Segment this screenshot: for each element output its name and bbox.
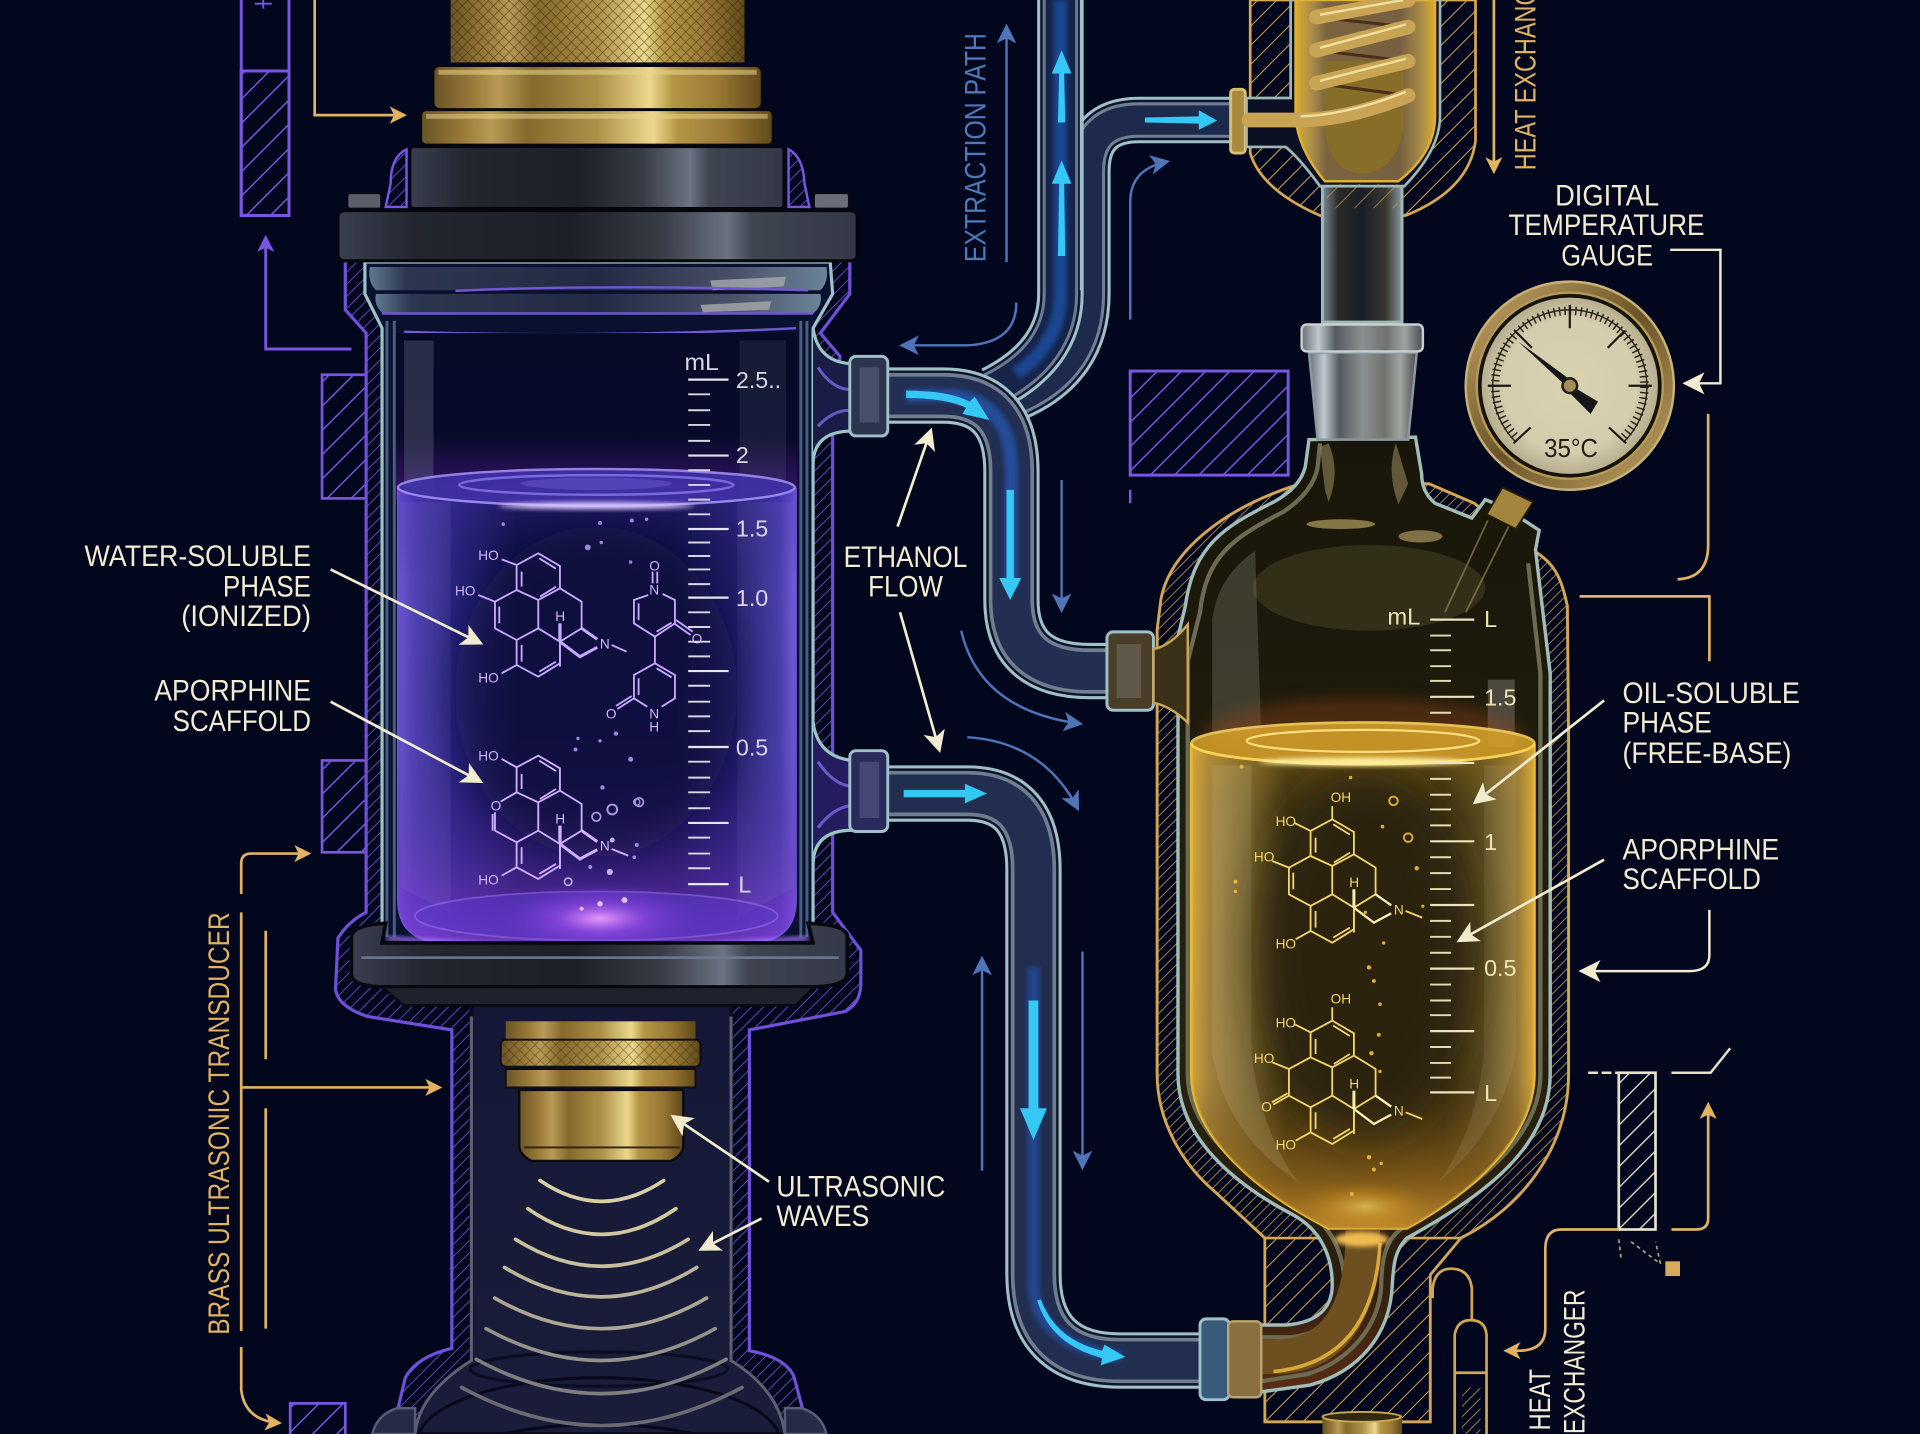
gauge major ticks (1488, 305, 1652, 443)
molecule: bipyridone: N (649, 706, 659, 721)
chamber interior (415, 1004, 785, 1434)
purple liquid vertical glow (398, 487, 796, 943)
shoulder glint (1307, 519, 1375, 529)
top flange (338, 211, 857, 261)
scale ticks (688, 380, 729, 884)
vessel interior (396, 333, 797, 500)
molecule: water-soluble alkaloid: N (600, 636, 610, 651)
hatched block centre (1130, 371, 1288, 475)
gauge bezel (1466, 282, 1674, 490)
flange lower (351, 923, 847, 1005)
label: aporphine scaffold right: SCAFFOLD (1622, 863, 1761, 896)
neck hatch (1327, 184, 1397, 208)
label: water-soluble phase: WATER-SOLUBLE (84, 540, 311, 573)
flow arrow lower right (904, 784, 987, 803)
scale labels: mL (684, 349, 719, 375)
vessel housing: purple section outline (336, 260, 861, 1429)
extraction main pipe (992, 0, 1081, 389)
purple liquid (398, 487, 796, 943)
flow arrow lower down (1020, 1000, 1047, 1140)
back coil lines (1316, 17, 1408, 96)
label: water-soluble phase: PHASE (223, 570, 311, 603)
lower housing: transducer chamber (372, 1004, 827, 1434)
arm glints (818, 367, 850, 828)
label: oil-soluble phase: (FREE-BASE) (1622, 737, 1791, 770)
flow arrow upper curve (906, 391, 989, 420)
exchanger glass body (1247, 0, 1440, 186)
wall reflection left (1212, 551, 1261, 735)
label: oil-soluble phase: OIL-SOLUBLE (1622, 677, 1800, 710)
transducer lower ring (506, 1069, 696, 1087)
bottom glow (415, 892, 778, 940)
scale labels: 1.0 (736, 585, 768, 611)
label: heat exchanger bottom: HEAT (1524, 1369, 1557, 1430)
flask inlet flare (1153, 625, 1188, 723)
molecule: bipyridone: O (692, 631, 702, 646)
connector flask outlet blue (1200, 1319, 1229, 1400)
upper arm flare (813, 328, 852, 463)
molecule: aporphine scaffold (purple) (478, 749, 628, 888)
label: exchanger bottom: EXCHANGER (1558, 1289, 1591, 1434)
oil phase bracket (1580, 596, 1709, 661)
transducer bottom branch (241, 1347, 279, 1423)
hatched block upper (322, 375, 366, 498)
dark liquid core (1255, 771, 1476, 1139)
connector sheens (860, 367, 1141, 818)
flask scale labels: 1.5 (1484, 684, 1516, 710)
label: ethanol flow: FLOW (868, 570, 943, 603)
molecule: water-soluble alkaloid: HO (478, 548, 499, 563)
dashed marks (1619, 1239, 1660, 1264)
connector exchanger brass (1231, 89, 1245, 153)
top right exchanger arrow (1493, 0, 1495, 171)
scale labels: L (738, 872, 751, 898)
molecule: gold aporphine lower: O (1261, 1099, 1272, 1114)
purple leader arrow (266, 238, 351, 349)
top cap leader (315, 0, 404, 115)
gauge arc line (1493, 310, 1647, 442)
neck glow (1335, 1232, 1389, 1247)
gauge hub (1562, 378, 1577, 393)
wall reflection right (1488, 680, 1515, 747)
rim highlights (700, 277, 786, 312)
left extraction vessel (glass) (365, 262, 833, 955)
inner wall bands (387, 321, 807, 937)
outlet tube highlight (1273, 1243, 1380, 1372)
capsule hatch (1462, 1387, 1480, 1434)
molecule: gold aporphine lower: HO (1254, 1051, 1274, 1066)
molecule: aporphine scaffold (purple): HO (478, 749, 499, 764)
pipe connectors (850, 89, 1245, 1400)
glowing flow arrows (904, 50, 1217, 1365)
exchanger outlet pipe (1433, 1269, 1472, 1320)
exchanger body fill (1296, 0, 1435, 181)
white hatch column (1619, 1073, 1656, 1229)
flask scale minor ticks (1430, 636, 1451, 1078)
amber liquid (1191, 743, 1534, 1228)
flask bottom hatch block (1265, 1238, 1461, 1422)
molecule: water-soluble alkaloid: HO (455, 584, 475, 599)
hatched block lower (322, 760, 366, 852)
molecule: gold aporphine upper: HO (1276, 936, 1296, 951)
flask scale labels: 0.5 (1484, 955, 1516, 981)
receiving flask housing (1157, 484, 1569, 1422)
liquid surface (398, 469, 795, 509)
hatched column top left (241, 0, 289, 216)
molecule: gold aporphine upper: OH (1331, 790, 1351, 805)
ultrasonic wave arcs (462, 1181, 742, 1425)
knurled brass cap (451, 0, 744, 62)
lower ethanol pipe (884, 794, 1212, 1361)
extraction branch pipe (1016, 120, 1231, 398)
rim violet lines (382, 287, 813, 334)
label: digital temperature gauge: TEMPERATURE (1509, 209, 1704, 242)
exchanger bulb (1325, 61, 1403, 174)
molecule: gold aporphine lower: OH (1331, 991, 1351, 1006)
molecule: aporphine scaffold (purple): O (491, 799, 501, 814)
gauge tick arc (1495, 311, 1644, 440)
flask scale labels: 1 (1484, 829, 1497, 855)
flange highlight (361, 957, 839, 959)
molecule: gold aporphine lower: H (1349, 1076, 1359, 1091)
transducer inner rule (265, 931, 267, 1329)
flask scale major ticks (1430, 620, 1474, 1092)
bell inner rims (419, 1352, 779, 1434)
transducer top branch (241, 854, 309, 894)
molecule: gold aporphine upper: HO (1254, 850, 1274, 865)
molecule: bipyridone: N (649, 582, 659, 597)
dashed top line (1588, 1072, 1619, 1074)
label: water-soluble phase: (IONIZED) (181, 600, 311, 633)
flange ring (351, 923, 847, 987)
flow arrow branch (1145, 110, 1217, 130)
molecule: bipyridone: O (649, 559, 660, 574)
scale labels: 2.5.. (736, 367, 781, 393)
molecule: water-soluble alkaloid (455, 548, 627, 685)
molecule: gold aporphine lower: HO (1276, 1015, 1296, 1030)
transducer horn (519, 1090, 683, 1161)
glass reflection right (740, 340, 786, 494)
molecule: water-soluble alkaloid: H (555, 609, 565, 624)
label: digital temperature gauge: DIGITAL (1555, 180, 1659, 213)
shoulder reflections (1320, 443, 1408, 505)
digital temperature gauge (1466, 282, 1674, 529)
connector lower arm (850, 751, 888, 831)
label: brass ultrasonic transducer: BRASS ULTRASONIC TRANSDUCER (203, 912, 236, 1335)
bubbles in purple liquid (502, 518, 648, 911)
lower arm flare (813, 723, 852, 863)
glass reflection left (404, 340, 433, 494)
gauge bezel inner (1477, 293, 1663, 479)
gold schematic extras, bottom right (1322, 1048, 1730, 1434)
bell base (372, 1408, 827, 1434)
brass ring lower highlight (426, 114, 768, 119)
flask glass outline (1178, 437, 1550, 1392)
connection arms from vessel (813, 328, 852, 863)
liquid bottom glow (1292, 1179, 1439, 1233)
callout arrows (331, 431, 1604, 1249)
molecule: aporphine scaffold (purple): N (600, 839, 610, 854)
ember glow above liquid (1204, 698, 1522, 771)
flow arrow lower curve (1037, 1299, 1125, 1365)
molecule: gold aporphine lower (1254, 991, 1422, 1153)
outlet brass connector (1228, 1321, 1261, 1397)
exchanger neck (1322, 184, 1402, 322)
label: aporphine scaffold right: APORPHINE (1622, 834, 1779, 867)
brass ring lower (421, 110, 773, 145)
gold leaders (241, 0, 1709, 1423)
gauge leader (1670, 250, 1720, 383)
bubbles in amber liquid (1234, 765, 1424, 1196)
flask scale labels (1387, 604, 1516, 1106)
thin blue flow guide arrows (902, 27, 1167, 1171)
brass ring upper (433, 66, 762, 109)
ground glass stopper (1302, 325, 1423, 440)
small brass cylinder (1322, 1412, 1402, 1434)
minor scale ticks (688, 394, 710, 868)
molecule: bipyridone (606, 559, 702, 735)
capsule (1455, 1320, 1487, 1434)
oil-phase flask (1178, 437, 1550, 1397)
thermowell lines (1445, 520, 1509, 612)
stopper taper (1309, 353, 1417, 440)
molecule: aporphine scaffold (purple): H (555, 811, 565, 826)
gauge face (1482, 298, 1658, 474)
label: ultrasonic waves: WAVES (776, 1200, 869, 1233)
scale labels (684, 349, 781, 898)
molecule: gold aporphine lower: HO (1276, 1138, 1296, 1153)
inner tan band left (1212, 765, 1298, 1182)
glass rim band 2 (375, 294, 821, 313)
flask inner wall (1188, 443, 1540, 1381)
dark liquid core (456, 527, 737, 857)
flask bottom hatch lines (1265, 1238, 1461, 1422)
inner tan band right (1439, 765, 1516, 1182)
purple rim light (387, 938, 808, 947)
molecule: gold aporphine upper: H (1349, 875, 1359, 890)
top leader (1671, 1048, 1730, 1073)
flow arrow up 1 (1052, 50, 1071, 122)
liquid refraction bands (400, 502, 793, 918)
flask outlet tube (1256, 1229, 1363, 1357)
small square (1665, 1261, 1680, 1276)
chamber wall lines (415, 1016, 785, 1434)
scale labels: 0.5 (736, 735, 768, 761)
molecule: gold aporphine upper: N (1394, 902, 1404, 917)
label: ultrasonic waves: ULTRASONIC (776, 1170, 945, 1203)
gauge stem (1487, 487, 1533, 529)
arm glass outline (813, 328, 852, 863)
molecule: water-soluble alkaloid: HO (478, 670, 499, 685)
dark collar (410, 147, 784, 208)
top brass and flange assembly (338, 0, 857, 261)
inner dome (1253, 545, 1485, 631)
scale labels: 2 (736, 442, 749, 468)
molecule: aporphine scaffold (purple): HO (478, 873, 499, 888)
liquid surface (1191, 723, 1534, 766)
label: oil-soluble phase: PHASE (1622, 706, 1712, 739)
flow arrow up 2 (1052, 160, 1071, 256)
transducer knurled ring (501, 1040, 700, 1067)
label: aporphine scaffold left: APORPHINE (154, 674, 311, 707)
bolt right (814, 193, 849, 208)
gauge needle (1518, 342, 1598, 414)
molecule: gold aporphine lower: N (1394, 1104, 1404, 1119)
coil highlight (1300, 0, 1406, 116)
label: aporphine scaffold left: SCAFFOLD (173, 705, 311, 738)
collar hatch right (789, 149, 809, 207)
molecule: gold aporphine upper (1254, 790, 1422, 951)
glass shell (365, 262, 833, 945)
panel: purple schematic hatch blocks and leader lines (241, 0, 1288, 1434)
collar hatch left (386, 149, 407, 207)
flask scale labels: mL (1387, 604, 1420, 630)
scaffold return leader (1582, 910, 1709, 971)
transducer spine (240, 912, 242, 1331)
heat exchanger condenser (1247, 0, 1476, 322)
molecule: gold aporphine upper: HO (1276, 814, 1296, 829)
flask scale labels: L (1484, 1080, 1497, 1106)
connector upper arm (850, 356, 888, 436)
volume scale (left vessel) (684, 349, 781, 898)
scale labels: 1.5 (736, 515, 768, 541)
upper ethanol pipe (884, 396, 1117, 671)
flange lip (382, 987, 814, 1005)
gauge reading: 35°C (1544, 435, 1598, 463)
molecule: bipyridone: O (606, 706, 617, 721)
flow arrow upper down (999, 490, 1021, 600)
stopper collar (1302, 325, 1423, 351)
molecule: bipyridone: H (649, 720, 659, 735)
transducer upper band (506, 1021, 696, 1041)
exchanger leader arrow (1506, 1229, 1619, 1351)
heat coil (1249, 0, 1408, 120)
gauge bracket (1678, 414, 1708, 579)
glass rim band 1 (369, 267, 827, 290)
transducer centre arrow (242, 1086, 440, 1089)
bottom hot spot (490, 882, 710, 955)
exchanger hatch housing (1250, 0, 1476, 216)
volume scale (flask) (1387, 604, 1516, 1106)
label: digital temperature gauge: GAUGE (1561, 240, 1653, 273)
bolt left (348, 193, 381, 208)
hatched block bottom (290, 1403, 345, 1434)
label: ethanol flow: ETHANOL (844, 541, 967, 574)
return leader arrow (1671, 1105, 1708, 1229)
icon: brass ultrasonic transducer (501, 1021, 700, 1161)
flask scale labels: L (1484, 606, 1497, 632)
shoulder glint 2 (1398, 530, 1442, 542)
brass ring upper highlight (438, 70, 757, 75)
amber vertical glow (1191, 743, 1534, 1228)
connector flask inlet (1107, 632, 1153, 710)
